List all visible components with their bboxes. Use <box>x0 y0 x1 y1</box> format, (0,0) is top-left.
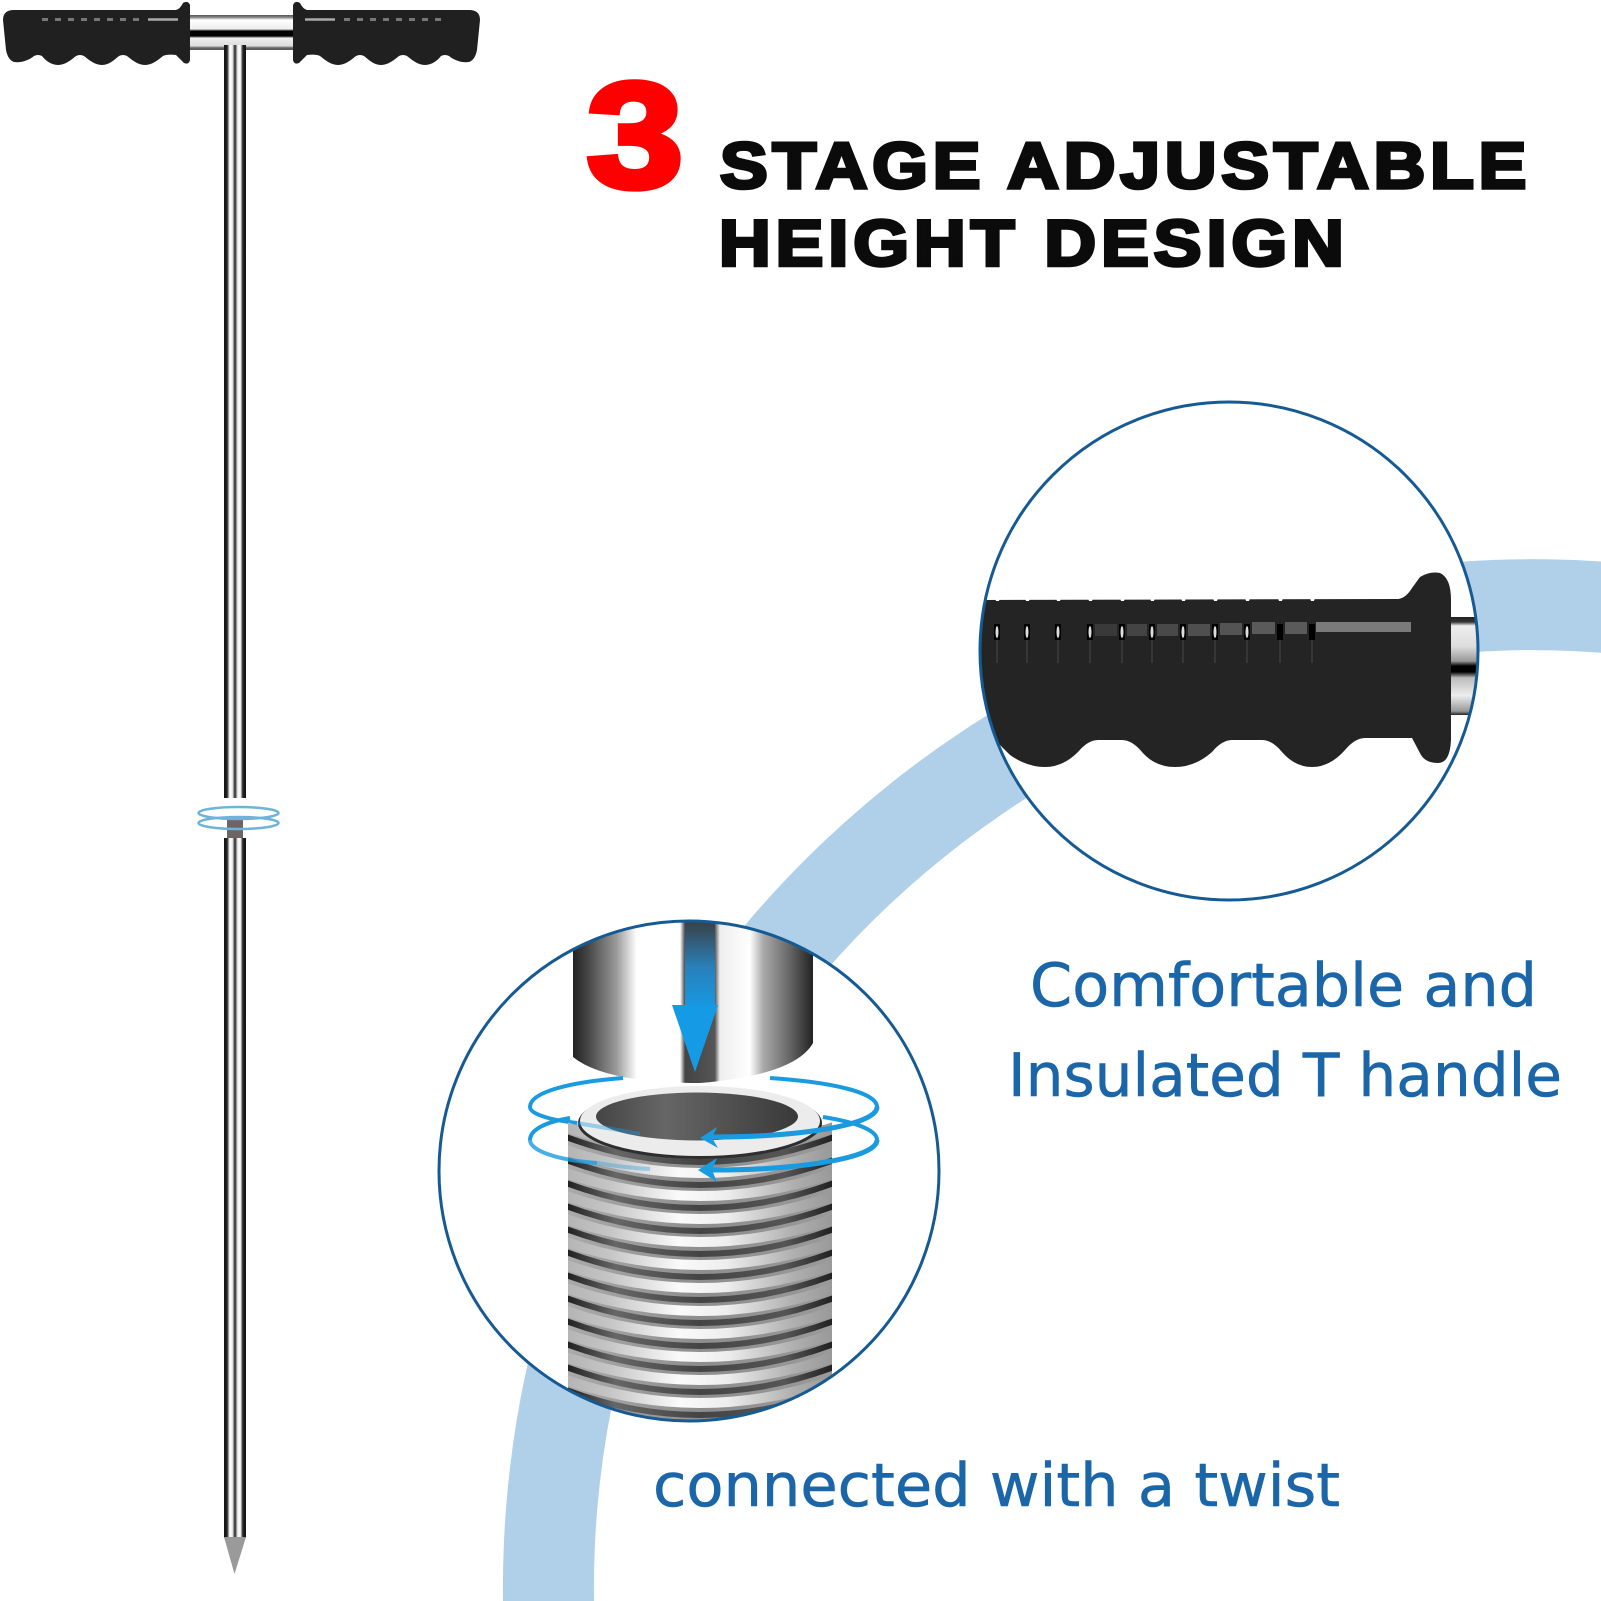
caption line two: Insulated T handle <box>1008 1041 1562 1111</box>
rotation arrowheads <box>698 1127 718 1182</box>
cylinder bore <box>596 1092 798 1140</box>
caption: handle <box>1008 951 1562 1111</box>
left rubber grip <box>3 2 190 65</box>
upper tube <box>573 922 813 1083</box>
rotation rings back <box>530 1078 877 1140</box>
rotation rings front <box>530 1107 877 1170</box>
panel: thread detail circle <box>439 900 939 1438</box>
threaded cylinder <box>566 1086 834 1438</box>
heading line one: STAGE ADJUSTABLE <box>720 130 1526 202</box>
rod tip <box>224 1537 246 1574</box>
threaded joint <box>227 819 243 839</box>
product: full T-handle probe <box>3 2 480 1574</box>
cylinder rim <box>578 1108 822 1159</box>
lower rod <box>224 838 246 1538</box>
blue down arrow <box>672 921 718 1072</box>
upper rod <box>224 45 246 798</box>
grip close-up <box>970 572 1451 767</box>
metal crossbar <box>188 15 296 50</box>
grip ribs <box>995 598 1315 663</box>
twist rings <box>198 807 278 829</box>
red number 3: 3 <box>586 51 684 219</box>
heading line two: HEIGHT DESIGN <box>719 207 1344 280</box>
panel: grip detail circle <box>970 402 1482 900</box>
caption: twist: connected with a twist <box>653 1451 1340 1521</box>
right rubber grip <box>293 2 480 65</box>
metal stub <box>1451 617 1476 715</box>
title <box>586 51 1526 280</box>
caption line one: Comfortable and <box>1030 951 1537 1021</box>
grip highlight band <box>1316 622 1411 632</box>
light blue arc band <box>503 559 1601 1601</box>
